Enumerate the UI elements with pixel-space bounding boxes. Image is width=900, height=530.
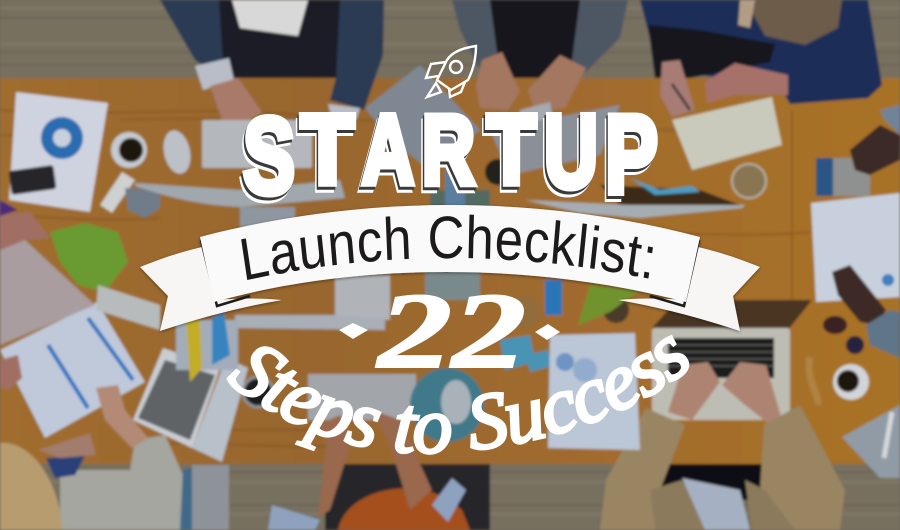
man in grey jacket, top centre — [452, 0, 628, 112]
tablet computer — [133, 348, 248, 462]
digits: 22 — [375, 272, 526, 391]
face layer: S — [243, 95, 295, 216]
centre desk clutter — [235, 65, 620, 372]
hands on laptop — [668, 362, 785, 430]
tagline: Steps to Success: Steps to Success — [226, 334, 690, 455]
person in tan jacket, bottom — [600, 405, 845, 530]
coffee cup, right — [833, 364, 869, 400]
woman in navy, top right — [640, 0, 882, 117]
desk — [0, 78, 900, 464]
shadow line layer: R — [420, 98, 474, 208]
left diamond — [339, 323, 368, 339]
outline layer: S — [240, 101, 292, 222]
white box under plant — [96, 285, 160, 330]
outline layer: P — [602, 98, 655, 222]
person in orange, bottom centre — [268, 410, 490, 530]
shadow line layer: U — [542, 97, 596, 213]
clipboard with chart — [9, 92, 108, 212]
outline layer: R — [419, 100, 472, 210]
face layer: A — [362, 94, 414, 204]
subtitle text: Launch Checklist: — [241, 214, 653, 280]
open notebook — [672, 97, 782, 170]
rocket icon — [426, 46, 476, 97]
dark hand on papers — [832, 265, 900, 358]
water glass — [732, 164, 766, 198]
ribbon banner — [140, 205, 760, 331]
face layer: T — [301, 94, 354, 204]
number 22 — [339, 272, 560, 391]
subtitle arc guide — [243, 258, 660, 281]
ribbon main panel — [200, 205, 700, 302]
title: STARTUP — [240, 92, 658, 222]
outline layer: U — [541, 100, 595, 216]
right diamond — [535, 324, 560, 340]
tagline arc guide — [226, 366, 692, 453]
outline layer — [240, 98, 655, 222]
coffee cup — [111, 132, 147, 168]
stationery — [100, 172, 160, 218]
subtitle: Launch Checklist — [241, 214, 653, 280]
laptop — [652, 300, 812, 420]
blonde woman, bottom left — [0, 385, 229, 530]
outline layer: A — [359, 100, 411, 210]
shadow line layer: T — [486, 98, 534, 208]
chart lines on notes — [48, 318, 133, 408]
hand at left edge — [0, 212, 50, 250]
mouse — [160, 128, 194, 176]
shadow line layer: A — [360, 98, 412, 208]
face layer: U — [544, 94, 598, 210]
cup, lower centre — [243, 377, 273, 407]
teal mouse pad with mouse — [410, 368, 484, 442]
ribbon dark fold edge, left — [201, 240, 250, 306]
green plant — [50, 223, 128, 292]
sunglasses — [823, 316, 864, 354]
open book, left — [0, 240, 95, 345]
notes with blue bars, left — [0, 302, 145, 438]
face layer: P — [605, 92, 658, 216]
stacked folders — [176, 312, 238, 382]
papers, right — [811, 193, 900, 302]
shadow line layer: S — [242, 98, 294, 219]
face layer: R — [422, 94, 475, 204]
face layer: T — [487, 94, 536, 204]
ribbon dark fold edge, right — [650, 240, 699, 306]
dark hand, upper right — [850, 105, 900, 175]
ribbon right tail — [618, 247, 760, 331]
shadow line layer — [242, 96, 656, 220]
face layer — [243, 92, 658, 216]
paper with map — [548, 333, 640, 450]
keyboard — [202, 120, 312, 168]
shadow line layer: P — [604, 96, 656, 220]
ribbon left tail — [140, 247, 282, 331]
purple sleeve — [0, 200, 18, 216]
calculator — [816, 158, 870, 196]
lower left hand — [0, 355, 22, 390]
small potted plant — [578, 285, 640, 325]
outline layer: T — [484, 100, 533, 210]
shadow line layer: T — [300, 98, 352, 208]
outline layer: T — [298, 100, 351, 210]
tablet and pen, bottom right — [842, 405, 900, 478]
desktop monitors — [135, 102, 745, 227]
man in suit, top left — [160, 0, 384, 135]
lower keyboard — [308, 374, 416, 420]
